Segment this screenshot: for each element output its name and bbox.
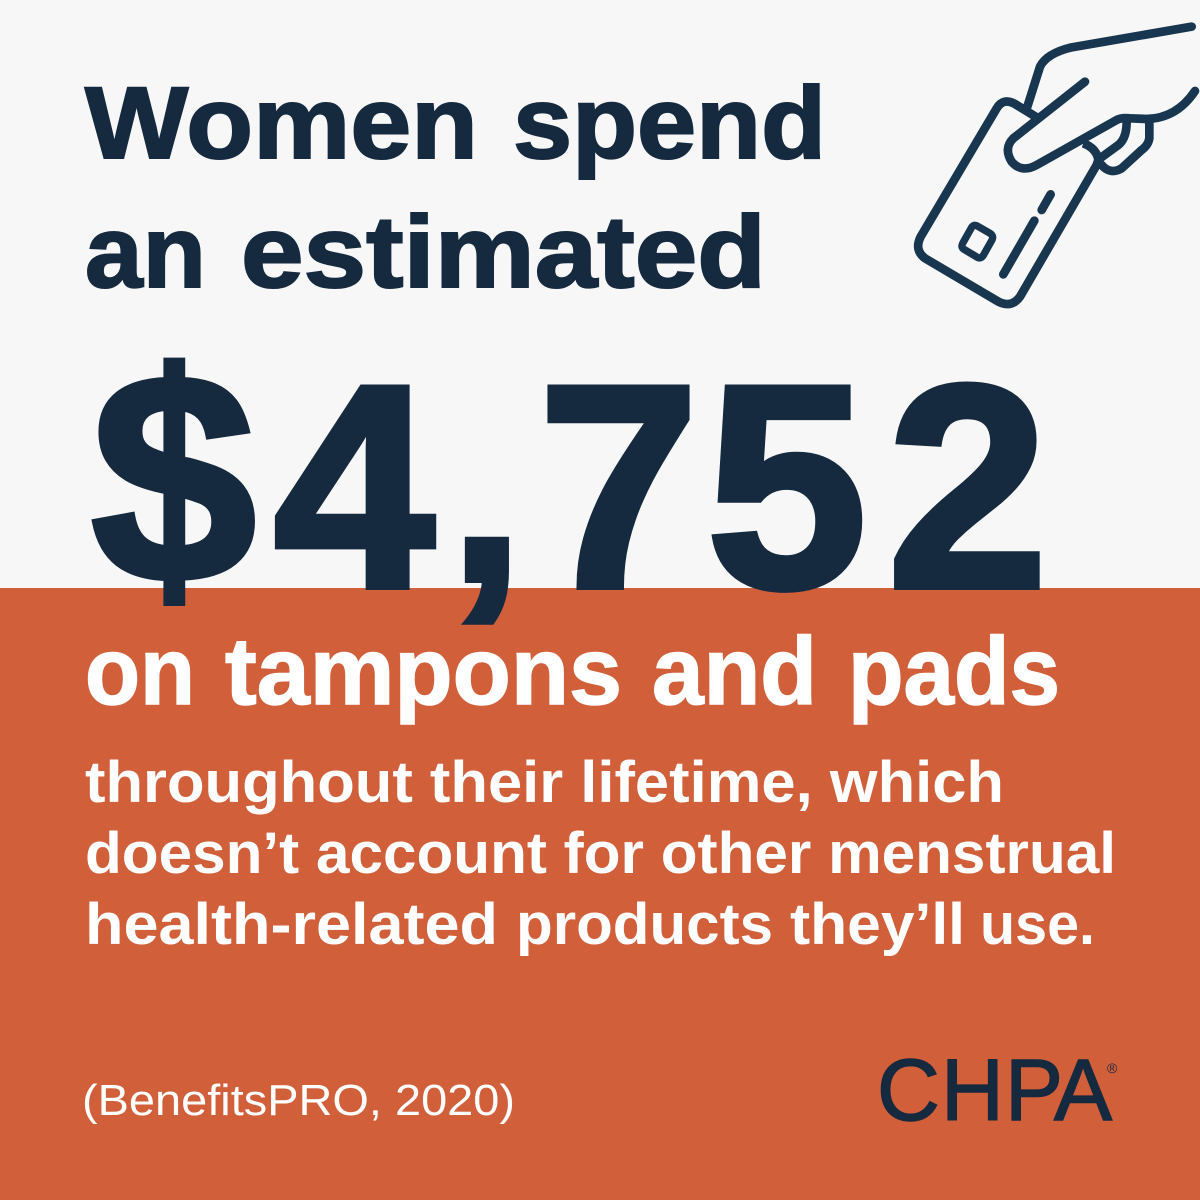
text block: lifetime description: health-related [85, 892, 498, 957]
heading: Women spend an estimated: estimated [241, 195, 766, 309]
big number: $4,752: 7 [538, 325, 699, 649]
subheading: on tampons and pads: tampons [225, 618, 622, 725]
subheading: on tampons and pads: and [652, 618, 817, 725]
text block: lifetime description: they’ll [790, 892, 965, 957]
heading: Women spend an estimated: an [85, 195, 206, 309]
source citation: (BenefitsPRO, 2020) [82, 1076, 515, 1125]
big number: $4,752: 2 [887, 325, 1048, 649]
text block: lifetime description: throughout their lifetime, which [85, 750, 1004, 815]
logo: CHPA [877, 1042, 1118, 1139]
text block: lifetime description [85, 750, 1116, 957]
text block: lifetime description: products [516, 892, 773, 957]
logo: CHPA: ® [1107, 1060, 1118, 1076]
big number: $4,752: 4 [274, 325, 437, 649]
heading: Women spend an estimated: spend [513, 66, 826, 180]
text block: lifetime description: use. [980, 892, 1095, 957]
icon: hand holding credit card [918, 27, 1195, 304]
logo: CHPA: C [877, 1042, 940, 1139]
panel: orange lower section [0, 588, 1200, 1200]
heading: Women spend an estimated: Women [85, 66, 478, 180]
logo: CHPA: P [1005, 1042, 1063, 1139]
big number: $4,752: $ [91, 312, 256, 644]
heading: Women spend an estimated [85, 66, 826, 309]
logo: CHPA: H [941, 1042, 1004, 1139]
subheading: on tampons and pads: pads [848, 618, 1060, 725]
big number: $4,752: 5 [706, 325, 867, 649]
logo: CHPA: A [1054, 1042, 1112, 1139]
subheading: on tampons and pads: on [85, 618, 195, 725]
big number: $4,752: , [449, 337, 524, 638]
text block: lifetime description: doesn’t account for other menstrual [85, 821, 1116, 886]
